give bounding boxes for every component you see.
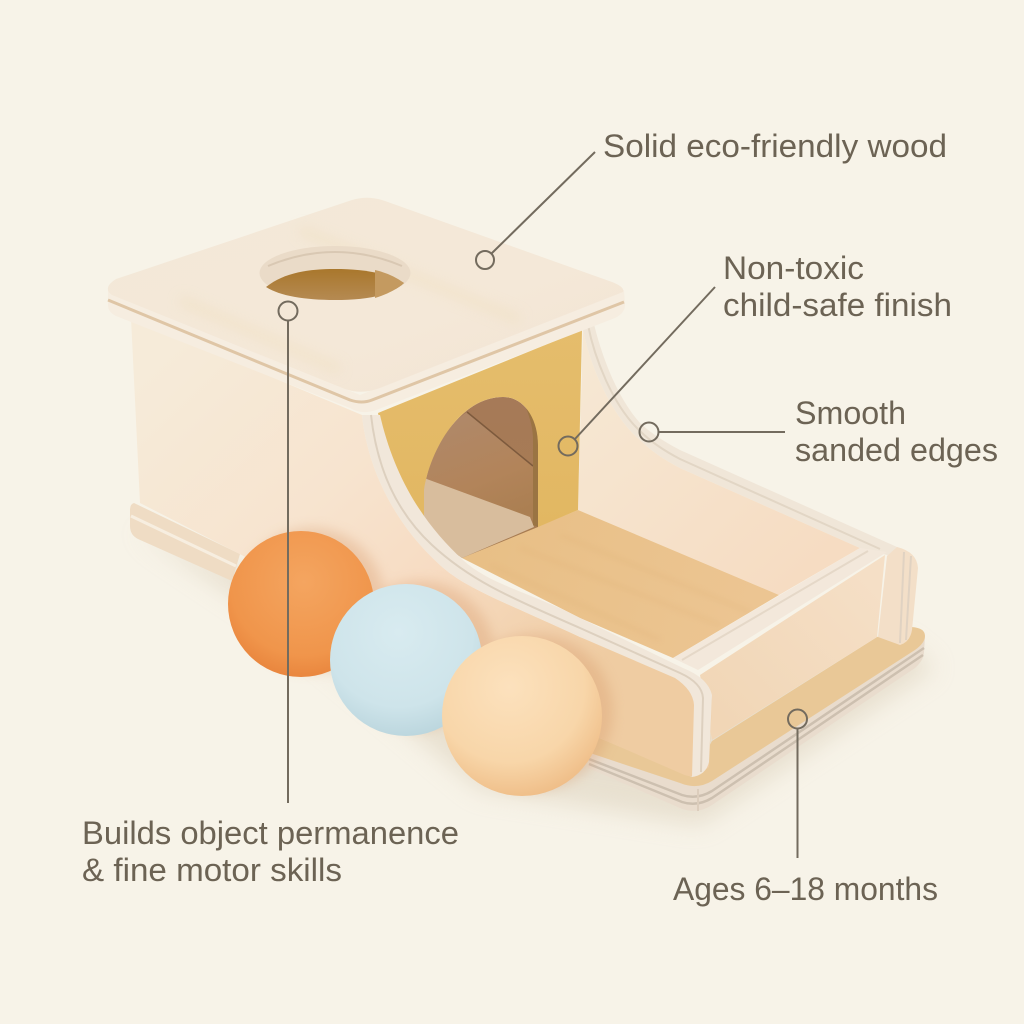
lid plywood edge [108, 290, 625, 412]
plywood band [588, 636, 925, 811]
yellow front face [378, 330, 582, 527]
curved plywood edge wrapping the corner [362, 415, 712, 777]
callout: smooth edges [640, 395, 998, 468]
tray floor [462, 510, 779, 658]
corner post [878, 547, 918, 645]
leader line [574, 287, 715, 440]
lid [108, 198, 625, 412]
far wall plywood edge [583, 320, 917, 570]
arch interior [424, 397, 538, 558]
yellow panel with arched opening [378, 330, 582, 558]
callout: solid wood [476, 128, 947, 269]
label: sanded edges [795, 432, 998, 468]
peach ball [442, 636, 602, 796]
label: Builds object permanence [82, 815, 459, 851]
product: wooden object permanence box [108, 198, 935, 825]
label [723, 250, 952, 323]
label: Ages 6–18 months [673, 871, 938, 907]
label: child-safe finish [723, 287, 952, 323]
lid top surface [108, 198, 623, 392]
hole in lid [260, 246, 410, 300]
label [82, 815, 459, 888]
tray base board, left [130, 503, 240, 581]
marker [640, 422, 658, 442]
marker [278, 302, 298, 320]
label [795, 395, 998, 468]
callout: object permanence [82, 302, 459, 888]
label: Non-toxic [723, 250, 864, 286]
marker [476, 251, 494, 269]
callout: non-toxic finish [558, 250, 952, 456]
label: Solid eco-friendly wood [603, 128, 947, 164]
left and front side panel [131, 318, 712, 777]
tray base board, right [588, 627, 925, 811]
cross board end of tray [673, 548, 887, 740]
soft ground shadow [135, 530, 935, 825]
label: & fine motor skills [82, 852, 342, 888]
orange ball [228, 531, 374, 677]
top surface [590, 627, 925, 786]
leader line [659, 431, 785, 433]
marker [558, 436, 578, 456]
marker [788, 710, 807, 728]
ball shadows on box [240, 528, 613, 790]
light blue ball [330, 584, 482, 736]
leader line [492, 152, 595, 254]
far side wall [578, 328, 860, 595]
label: Smooth [795, 395, 906, 431]
callout: ages [673, 710, 938, 907]
leader line [287, 321, 289, 803]
leader line [796, 729, 798, 858]
